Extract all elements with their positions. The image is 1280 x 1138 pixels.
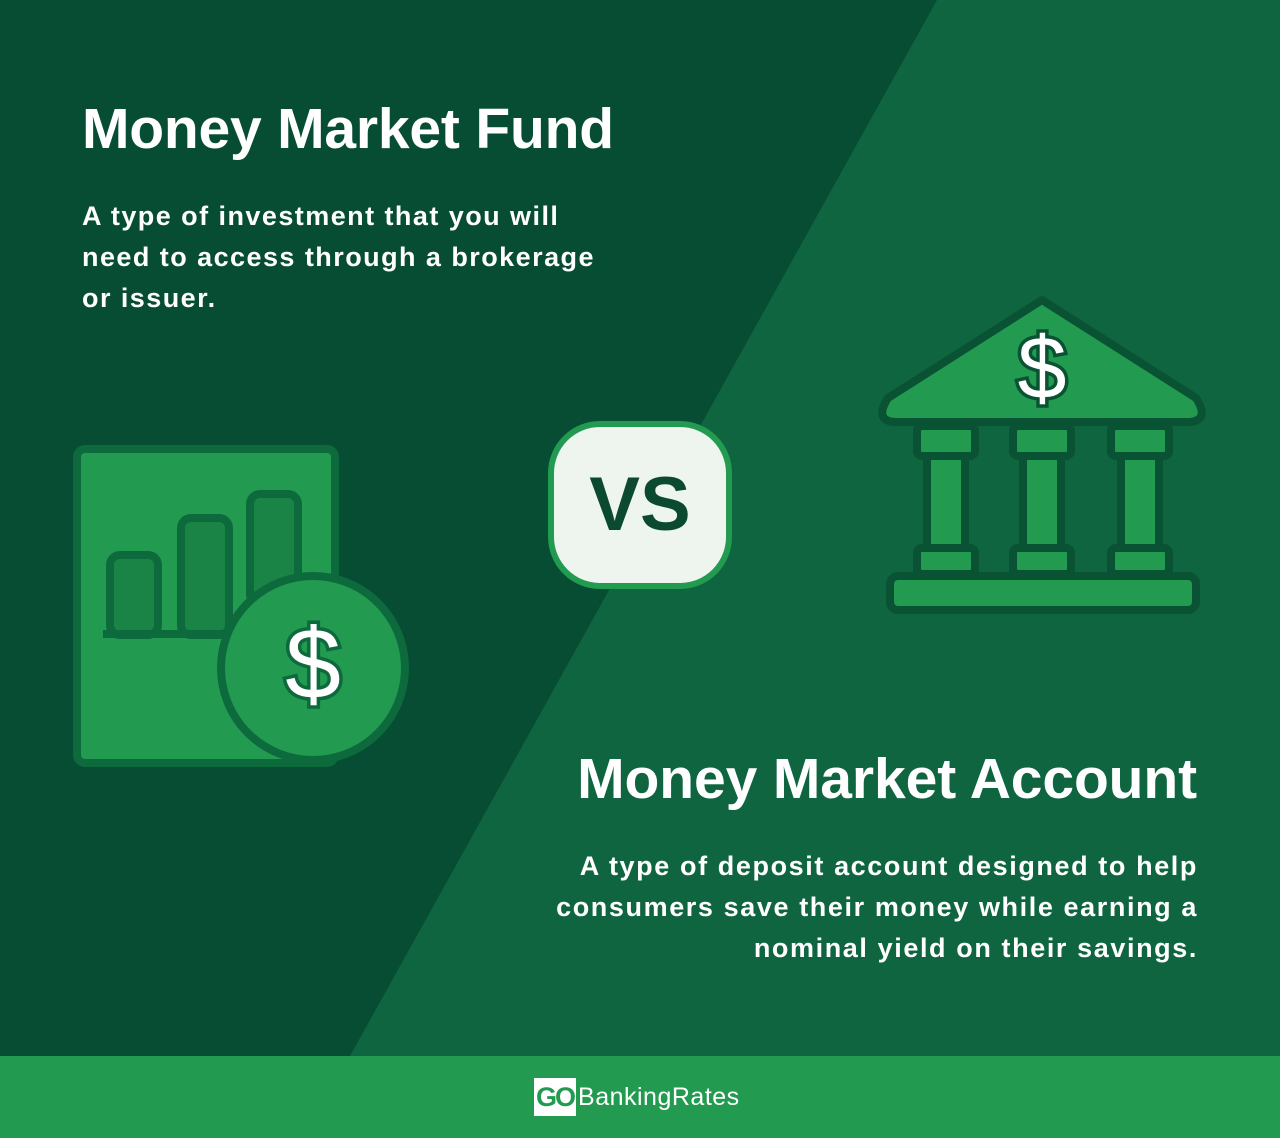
- icon: chart with dollar coin: $: [285, 608, 341, 720]
- text: account description: nominal yield on their savings.: [754, 933, 1198, 963]
- text: fund description: or issuer.: [82, 283, 217, 313]
- text: fund description: A type of investment that you will: [82, 201, 559, 231]
- title: money market fund: Money Market Fund: [82, 97, 614, 161]
- vs badge: VS: [589, 462, 691, 547]
- text: account description: consumers save their money while earning a: [556, 892, 1198, 922]
- text: fund description: [82, 201, 595, 313]
- text: account description: [556, 851, 1198, 963]
- vs badge: [548, 421, 732, 589]
- text: fund description: need to access through a brokerage: [82, 242, 595, 272]
- logo: GOBankingRates: [534, 1078, 740, 1116]
- logo: GOBankingRates: GO: [536, 1082, 574, 1112]
- logo: GOBankingRates: BankingRates: [578, 1082, 740, 1110]
- text: account description: A type of deposit account designed to help: [580, 851, 1198, 881]
- title: money market account: Money Market Account: [577, 747, 1197, 811]
- icon: bank: $: [1018, 318, 1066, 417]
- footer with logo: [0, 1056, 1280, 1138]
